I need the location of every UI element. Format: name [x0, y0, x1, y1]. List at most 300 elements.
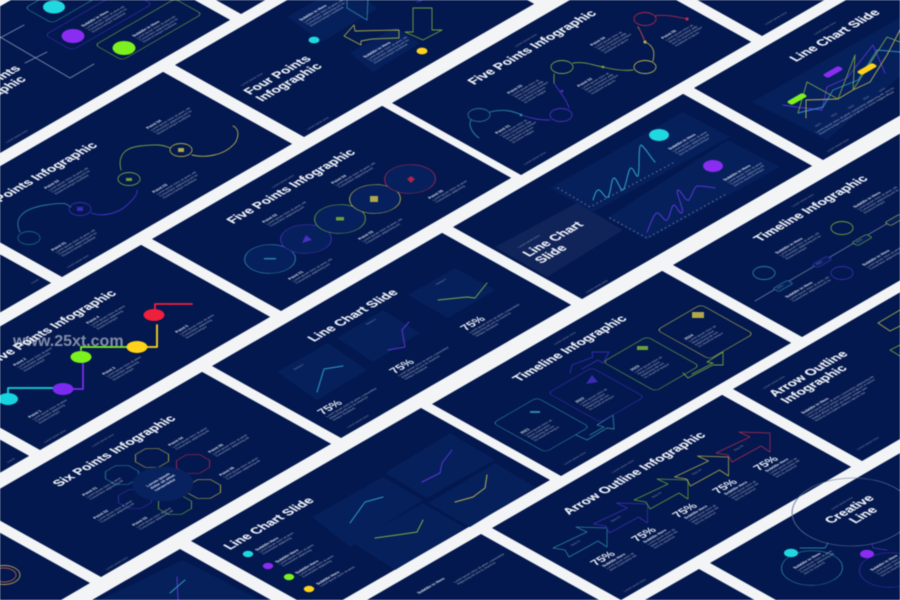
point 02 [92, 497, 137, 523]
footer: Lorem ipsum dolor [345, 414, 370, 428]
axis labels: 2024 [861, 95, 871, 100]
item two: Consectetur adipiscing [281, 549, 313, 567]
title: Slide [531, 243, 570, 265]
subtitle two: Consectetur adipiscing elit [729, 164, 765, 185]
page number: Lorem [29, 278, 41, 284]
point 4: Lorem ipsum dolor sit amet [89, 305, 126, 326]
point 03: Lorem ipsum dolor sit amet, elit [155, 171, 197, 195]
subtitle two: Consectetur adipiscing sed do [369, 39, 410, 62]
path nodes [520, 17, 689, 116]
value three: Lorem ipsum dolor sit amet, consectetur [468, 303, 522, 334]
green card: Lorem ipsum dolor sit amet elit [135, 15, 177, 39]
card 2022: Do eiusmod tempor [588, 394, 616, 411]
step line [8, 304, 192, 395]
point 3: Eiusmod tempor [111, 367, 136, 381]
step labels: Step 04 [690, 468, 703, 475]
axis labels [813, 87, 887, 127]
value 1: Lorem ipsum dolor sit [605, 552, 635, 570]
eyebrow: Lorem ipsum dolor [610, 459, 635, 473]
card 2023: Adipiscing elit sed [639, 362, 666, 377]
green card: Eiusmod tempor incididunt [141, 22, 178, 43]
step labels [569, 444, 745, 546]
slide: five points snake [0, 72, 292, 277]
card 2021 [493, 398, 589, 452]
value 2: Lorem ipsum dolor sit [646, 528, 676, 546]
point 01: Point 01 [50, 241, 68, 251]
point 01: Eiusmod tempor incididunt [60, 236, 97, 257]
value 3 [670, 496, 724, 527]
teal card [25, 0, 132, 23]
subtitle two: Subtitle in Here [362, 41, 393, 58]
subtitle teal: Sed do eiusmod [802, 561, 826, 575]
dots [784, 549, 874, 558]
point 04 [145, 104, 198, 135]
footer: Lorem ipsum dolor [4, 129, 29, 143]
subtitle two [362, 33, 415, 64]
value 3: Lorem ipsum dolor sit [687, 504, 717, 522]
card 2022: Amet consectetur [581, 392, 607, 407]
subtitle: Subtitle in Here [416, 577, 447, 594]
arrow step 05 [716, 432, 770, 462]
title: Five Points Infographic [464, 8, 600, 86]
value 2: Amet consectetur elit [649, 530, 679, 547]
icons [77, 148, 184, 211]
point 01 [81, 474, 126, 500]
item three: Subtitle Here [294, 559, 321, 574]
point 03: Amet consectetur adip [513, 80, 545, 98]
value 4: Sed do eiusmod [733, 487, 757, 501]
subtitle one: Eiusmod tempor [784, 246, 809, 260]
series labels: Series 3 [434, 278, 448, 285]
point 05: Point 05 [427, 189, 445, 199]
slide: five points circles [152, 106, 511, 311]
point 02: Point 02 [576, 77, 594, 87]
subtitle one: Consectetur adipiscing sed do [305, 2, 346, 25]
step labels: Step 02 [609, 515, 622, 522]
point 05: Point 05 [660, 29, 678, 39]
linked circles [234, 159, 446, 279]
slide: line chart teal purple [453, 94, 812, 299]
point 3: Consectetur adipiscing [108, 361, 140, 379]
series labels: Series 2 [364, 318, 378, 325]
subtitle two [852, 183, 900, 214]
point 04 [167, 424, 212, 450]
slide: timeline dots [673, 132, 900, 337]
point 01: Consectetur adipiscing sed do [57, 232, 98, 255]
slide: bottom text fragment [367, 534, 599, 600]
card 2022 [548, 368, 644, 422]
series labels [292, 278, 448, 370]
arrows [570, 352, 723, 440]
card 2023: Do eiusmod tempor [643, 362, 671, 379]
green card [95, 0, 202, 60]
point 5: Lorem ipsum dolor sit amet [178, 314, 215, 335]
arrow step 03 [634, 479, 688, 509]
slide: arrow outline title [733, 256, 900, 461]
year pills: 2022 [814, 260, 824, 265]
description: Lorem ipsum dolor sit amet, consectetur [452, 552, 507, 583]
point 03: Incididunt ut labore [520, 86, 547, 102]
slide: line chart multi series [694, 0, 900, 160]
point 04: Consectetur adipiscing elit [174, 429, 210, 450]
value one: Lorem ipsum dolor sit amet, consectetur [325, 387, 379, 418]
value 4 [710, 472, 764, 503]
description: Lorem ipsum dolor sit amet, consectetur adipiscing elit, sed do [814, 87, 895, 133]
subtitle four: Subtitle in Here [861, 249, 892, 266]
point 03: Consectetur adipiscing elit [138, 509, 174, 530]
point 01 [494, 114, 545, 144]
arrow step 02 [594, 503, 648, 533]
value two [387, 340, 457, 380]
footer: Lorem ipsum dolor [42, 429, 67, 443]
card 2022: 2022 [574, 396, 586, 403]
point 03: Consectetur adipiscing sed [364, 223, 402, 244]
footer: Lorem ipsum dolor [855, 436, 880, 450]
subtitle teal: Lorem ipsum dolor sit amet [796, 550, 833, 571]
point 02: Lorem ipsum dolor sit [580, 72, 610, 89]
value 5: Sed do eiusmod [774, 464, 798, 478]
point 02: Amet consectetur adip [583, 73, 615, 91]
subtitle two: Lorem ipsum dolor sit amet [726, 162, 763, 183]
watermark: www.25xt.com [12, 333, 124, 350]
axis labels: 2025 [877, 87, 887, 92]
eyebrow: Lorem ipsum dolor [239, 72, 264, 86]
point 05: Lorem ipsum dolor sit amet [211, 434, 248, 455]
step dots [0, 309, 164, 405]
card 2023: Lorem ipsum dolor sit [633, 356, 663, 373]
card 2024: Adipiscing elit sed [693, 331, 720, 346]
value 4: Amet consectetur elit [730, 482, 760, 499]
centre disc: consectetur [152, 478, 177, 492]
description: Nostrud exercitation ullamco laboris nisi [814, 391, 867, 422]
point 01: Point 01 [494, 124, 512, 134]
point 02: Consectetur adipiscing sed [268, 206, 306, 227]
description: Adipiscing elit sed do eiusmod [456, 561, 497, 585]
purple card: Consectetur adipiscing sed do [87, 8, 128, 31]
point 01: Incididunt ut labore [508, 126, 535, 142]
title: Infographic [777, 363, 850, 405]
title: Arrow Outline Infographic [559, 430, 709, 516]
title: Line Chart Slide [220, 495, 317, 551]
slide: top right fragment [633, 0, 900, 36]
eyebrow: Lorem ipsum dolor [829, 496, 854, 510]
subtitle teal: Consectetur adipiscing elit [799, 552, 835, 573]
rings [0, 566, 20, 584]
item two: Subtitle Here [274, 548, 301, 563]
title: Creative [821, 493, 878, 525]
arrows [344, 0, 442, 45]
point 03: Consectetur adipiscing sed do [158, 174, 199, 197]
slide: line chart three panels [212, 233, 571, 438]
point 4: Eiusmod tempor [95, 316, 120, 330]
subtitle purple [869, 549, 900, 577]
green card: Subtitle in Here [131, 20, 162, 37]
subtitle three: Lorem ipsum dolor sit amet, elit [788, 276, 830, 300]
item one: Subtitle Here [254, 536, 281, 551]
point 03: Point 03 [131, 516, 149, 526]
point 1b: Eiusmod tempor [37, 410, 62, 424]
title: Five Points Infographic [223, 147, 359, 225]
card 2021: Adipiscing elit sed [529, 425, 556, 440]
step labels: Step 05 [732, 444, 745, 451]
point 1: Eiusmod tempor [22, 358, 47, 372]
point 04: Lorem ipsum dolor sit amet, elit [149, 107, 191, 131]
point 03: Eiusmod tempor incididunt [161, 178, 198, 199]
point 05: Lorem ipsum dolor sit amet [431, 180, 468, 201]
point 01 [50, 226, 103, 257]
value one: Tempor incididunt [331, 407, 357, 421]
slide: bottom chart fragment [92, 549, 271, 600]
value 5: Amet consectetur elit [771, 459, 801, 476]
eyebrow: Lorem ipsum dolor [513, 33, 538, 47]
item four: Subtitle Here [315, 570, 342, 585]
point 03 [506, 74, 557, 104]
title: Four Points [240, 53, 314, 96]
card 2021: 2021 [519, 427, 531, 434]
year pills [773, 214, 900, 292]
point 02: Consectetur adipiscing elit [99, 502, 135, 523]
card 2021: Amet consectetur [526, 423, 552, 438]
step labels: Step 03 [650, 491, 663, 498]
point 1b: Point 1 [27, 409, 43, 418]
point 01: Consectetur adipiscing sed [294, 263, 332, 284]
subtitle one: Sed do eiusmod tempor [677, 136, 711, 156]
point 03: Point 03 [151, 183, 169, 193]
value three: Adipiscing elit sed do eiusmod [471, 312, 512, 336]
value 4: Lorem ipsum dolor sit [727, 480, 757, 498]
slide: rings fragment [0, 511, 90, 600]
point 03: Point 03 [506, 84, 524, 94]
point 01: Lorem ipsum dolor sit amet [85, 477, 122, 498]
axis labels: 2021 [813, 122, 823, 127]
point 02: Incididunt ut labore [590, 79, 617, 95]
description: Lorem ipsum dolor sit amet, consectetur adipiscing elit [804, 375, 875, 416]
subtitle one: Consectetur adipiscing elit [674, 133, 710, 154]
item three: Lorem ipsum dolor sit amet [298, 555, 335, 576]
value 5: 75% [751, 455, 782, 472]
footer: Lorem ipsum dolor [763, 11, 788, 25]
subtitle one [667, 128, 715, 156]
value two: Lorem ipsum dolor sit amet, consectetur [397, 346, 451, 377]
slide: top fragment [112, 0, 471, 14]
point 04: Lorem ipsum dolor sit [593, 31, 623, 48]
slide: fragment lower left [0, 384, 29, 589]
small circles [769, 544, 900, 594]
card 2021: Lorem ipsum dolor sit [523, 419, 553, 436]
centre disc: dolor sit amet [148, 473, 177, 490]
chart panel [752, 12, 900, 140]
card 2024 [657, 305, 753, 359]
point 04 [589, 26, 637, 54]
card 2024: 2024 [683, 333, 695, 340]
year pills: 2021 [775, 284, 785, 289]
value 2: 75% [629, 526, 660, 543]
value two: Adipiscing elit sed do eiusmod [400, 355, 441, 379]
card 2021: Do eiusmod tempor [533, 425, 561, 442]
subtitle teal [792, 547, 840, 575]
card 2024: Amet consectetur [690, 329, 716, 344]
centre disc: Lorem ipsum [145, 472, 172, 487]
card 2022: Adipiscing elit sed [584, 394, 611, 409]
item three [294, 552, 338, 578]
item three: Consectetur adipiscing [301, 560, 333, 578]
value 2 [629, 520, 683, 551]
point 02 [576, 67, 624, 95]
eyebrow: Lorem ipsum dolor [790, 193, 815, 207]
item one: Lorem ipsum dolor sit amet [258, 532, 295, 553]
purple card: Subtitle in Here [80, 10, 111, 27]
subtitle two: Lorem ipsum dolor sit amet, elit [366, 36, 408, 60]
description: Magna aliqua ut enim ad minim veniam quis [810, 386, 869, 420]
value two: Tempor incididunt [403, 366, 429, 380]
subtitle one [298, 0, 351, 27]
title: Timeline Infographic [750, 173, 871, 243]
point 05 [427, 177, 472, 203]
point 05 [207, 431, 252, 457]
item one: Consectetur adipiscing [261, 537, 293, 555]
eyebrow: Lorem ipsum dolor [552, 331, 577, 345]
eyebrow: Lorem ipsum dolor [90, 433, 115, 447]
panels [287, 0, 420, 72]
point 04: Consectetur adipiscing sed do [152, 110, 193, 133]
point 05: Amet consectetur adip [667, 25, 699, 43]
point 03 [131, 504, 176, 530]
subtitle two: Eiusmod tempor incididunt [372, 43, 409, 64]
value 5: Subtitle Here [763, 457, 790, 473]
value 2: Subtitle Here [641, 528, 668, 544]
point 3 [101, 353, 149, 381]
item one [254, 529, 298, 555]
point 02: Lorem ipsum dolor sit amet, elit [47, 167, 89, 191]
subtitle one: Subtitle in Here [774, 237, 805, 254]
point 5: Eiusmod tempor [184, 325, 209, 339]
panel [100, 560, 260, 600]
arrow step 01 [553, 527, 607, 557]
point 01: Amet consectetur adip [501, 120, 533, 138]
chart panels [550, 112, 780, 240]
value 3: Subtitle Here [682, 504, 709, 520]
card 2024: Lorem ipsum dolor sit [687, 325, 717, 342]
point 06 [218, 454, 263, 480]
point 05: Sed do eiusmod tempor [670, 25, 704, 45]
title [0, 63, 36, 116]
subtitle teal: Subtitle in Here [792, 552, 823, 569]
chart teal [558, 145, 673, 207]
footer: Lorem ipsum dolor [622, 578, 647, 592]
cards [878, 310, 900, 356]
purple card [45, 0, 152, 50]
point 05: Lorem ipsum dolor sit [664, 24, 694, 41]
point 02: Consectetur adipiscing sed do [50, 170, 91, 193]
card 2022: Lorem ipsum dolor sit [578, 388, 608, 405]
eyebrow: Lorem ipsum dolor [270, 174, 295, 188]
item two: Lorem ipsum dolor sit amet [278, 544, 315, 565]
footer: Lorem ipsum dolor [825, 138, 850, 152]
slide: three points cards [0, 0, 230, 153]
point 05: Incididunt ut labore [674, 31, 701, 47]
point 02: Eiusmod tempor incididunt [53, 174, 90, 195]
subtitle two: Eiusmod tempor [862, 200, 887, 214]
value 3: Sed do eiusmod [693, 511, 717, 525]
subtitle two: Consectetur adipiscing sed do [859, 189, 900, 212]
subtitle three: Subtitle in Here [784, 281, 815, 298]
point 03: Lorem ipsum dolor sit amet [135, 507, 172, 528]
year pills: 2023 [854, 238, 864, 243]
slide: arrow outline steps [492, 395, 851, 600]
subtitle two [722, 159, 770, 187]
point 03: Lorem ipsum dolor sit amet, elit [361, 218, 403, 242]
series labels: Series 1 [292, 363, 306, 370]
point 02: Point 02 [261, 213, 279, 223]
point 01: Point 01 [287, 270, 305, 280]
eyebrow: Lorem ipsum dolor [812, 21, 837, 35]
subtitle two: Sed do eiusmod tempor [732, 167, 766, 187]
point 5 [174, 311, 222, 339]
value 1: Subtitle Here [600, 552, 627, 568]
description: Subtitle in Here [800, 397, 831, 414]
subtitle one: Subtitle in Here [298, 4, 329, 21]
value three [458, 297, 528, 337]
point 01: Lorem ipsum dolor sit amet, elit [291, 258, 333, 282]
value 3: 75% [670, 502, 701, 519]
subtitle two: Subtitle in Here [852, 191, 883, 208]
value 1: Amet consectetur elit [608, 554, 638, 571]
point 01: Sed do eiusmod tempor [504, 120, 538, 140]
footer: Lorem ipsum dolor [522, 151, 547, 165]
point 03: Et dolore magna [523, 90, 547, 104]
subtitle one [774, 229, 827, 260]
lines [317, 283, 487, 392]
value 4: 75% [710, 478, 741, 495]
point 5: Consectetur adipiscing [181, 319, 213, 337]
page number: Lorem [5, 457, 17, 463]
step labels: Step 01 [569, 539, 582, 546]
point 1b: Lorem ipsum dolor sit amet [31, 399, 68, 420]
point 05: Point 05 [207, 443, 225, 453]
footer: Lorem ipsum dolor [584, 279, 609, 293]
point 06: Lorem ipsum dolor sit amet [222, 457, 259, 478]
footer: Lorem ipsum dolor [305, 116, 330, 130]
big circle [767, 464, 900, 560]
point 01: Et dolore magna [511, 130, 535, 144]
point 05 [660, 19, 708, 47]
panels [277, 268, 495, 400]
card 2023 [603, 337, 699, 391]
point 02: Lorem ipsum dolor sit amet [96, 500, 133, 521]
snake line [18, 126, 238, 244]
green card: Consectetur adipiscing sed do [138, 18, 179, 41]
point 03: Point 03 [357, 230, 375, 240]
description [800, 373, 885, 422]
point 01: Point 01 [81, 486, 99, 496]
lines [170, 577, 185, 600]
point 06: Consectetur adipiscing elit [225, 459, 261, 480]
point 04: Eiusmod tempor incididunt [155, 114, 192, 135]
subtitle purple: Subtitle in Here [869, 554, 900, 571]
point 01: Lorem ipsum dolor sit [498, 119, 528, 136]
point 04: Point 04 [145, 119, 163, 129]
subtitle one: Subtitle in Here [667, 133, 698, 150]
description: Eiusmod tempor incididunt ut labore et dolore magna aliqua [818, 90, 895, 135]
card 2024: Do eiusmod tempor [697, 331, 725, 348]
circle icons [264, 176, 415, 259]
value 1 [588, 544, 638, 573]
title panel [495, 203, 623, 277]
value one: 75% [315, 399, 346, 416]
chart lines [783, 30, 900, 118]
value 4: Subtitle Here [722, 480, 749, 496]
eyebrow: Lorem ipsum dolor [761, 375, 786, 389]
